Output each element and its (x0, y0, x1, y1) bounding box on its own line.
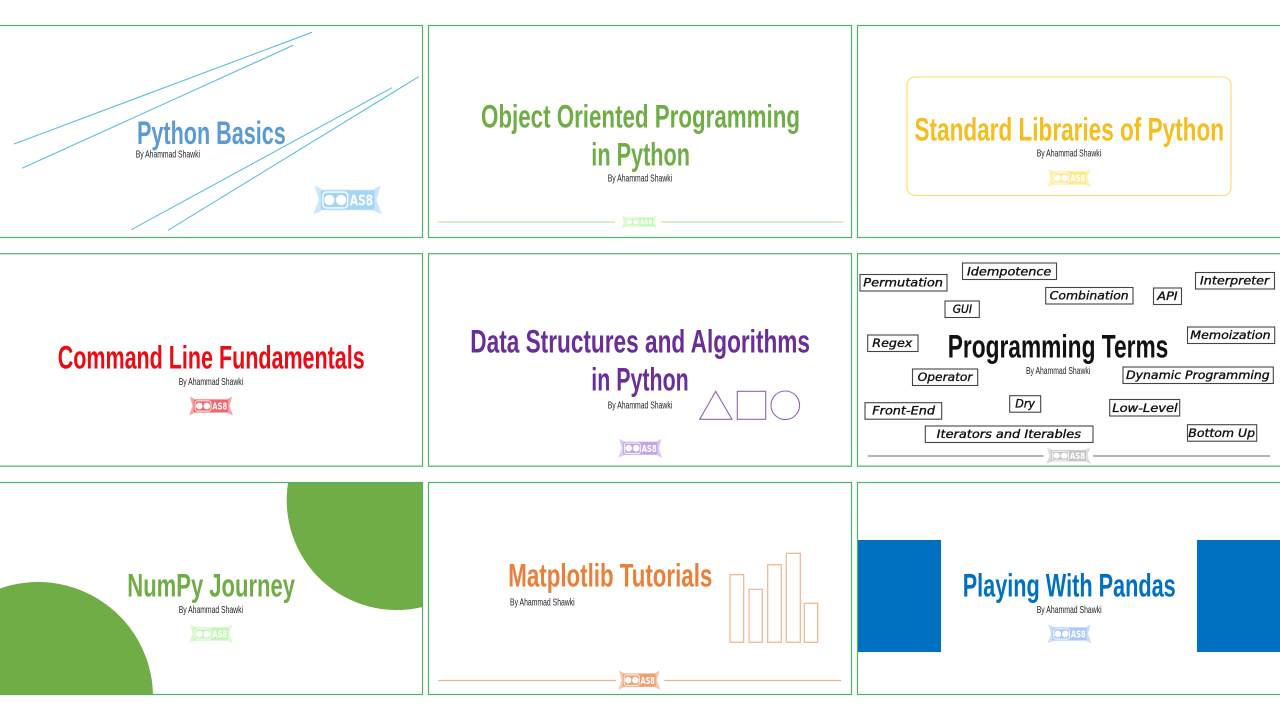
term: Dry (1010, 396, 1041, 412)
author: By Ahammad Shawki (179, 376, 243, 388)
title: Command Line Fundamentals (58, 340, 365, 376)
panel: Command Line Fundamentals (0, 254, 422, 466)
term: GUI: GUI (953, 302, 973, 316)
logo (1046, 448, 1091, 464)
title: Playing With Pandas (963, 568, 1176, 604)
decorative blue blocks (858, 540, 1280, 652)
term: Dry: Dry (1015, 396, 1035, 410)
term: Low-Level: Low-Level (1112, 401, 1179, 415)
icon: square (737, 391, 766, 419)
author: By Ahammad Shawki (1037, 604, 1102, 616)
term: Bottom Up: Bottom Up (1188, 426, 1255, 440)
logo (618, 439, 662, 458)
logo (618, 670, 660, 690)
logo (189, 624, 233, 643)
logo: AS8 (640, 218, 652, 226)
title: in Python (591, 137, 690, 173)
logo (1048, 624, 1092, 643)
author: By Ahammad Shawki (608, 400, 672, 412)
logo: AS8 (642, 444, 657, 455)
term: Regex (868, 335, 918, 352)
panel: Playing With Pandas (858, 482, 1280, 694)
term: Interpreter: Interpreter (1200, 273, 1271, 287)
term: Operator: Operator (918, 370, 974, 384)
term: Front-End: Front-End (872, 404, 936, 418)
term: Permutation: Permutation (863, 276, 943, 290)
term: API: API (1156, 289, 1178, 303)
term: GUI (945, 301, 979, 318)
logo (621, 216, 657, 229)
title: Data Structures and Algorithms (470, 324, 810, 360)
panel: Standard Libraries of Python (858, 26, 1280, 238)
term: Low-Level (1110, 400, 1180, 416)
panel: Data Structures and Algorithms (428, 254, 852, 466)
term: Iterators and Iterables (925, 426, 1093, 442)
logo (189, 396, 233, 415)
author: By Ahammad Shawki (510, 597, 575, 609)
logo: AS8 (1070, 173, 1085, 185)
footer rule (868, 455, 1270, 457)
author: By Ahammad Shawki (1037, 148, 1101, 160)
author: By Ahammad Shawki (179, 604, 243, 616)
icon: triangle (700, 391, 732, 419)
term: Idempotence: Idempotence (967, 264, 1051, 278)
panel: Programming Terms (858, 254, 1280, 466)
term: Memoization: Memoization (1190, 328, 1271, 342)
title: Object Oriented Programming (481, 98, 800, 134)
title: in Python (591, 362, 689, 398)
author: By Ahammad Shawki (1026, 365, 1090, 377)
panel: Matplotlib Tutorials (428, 482, 852, 694)
logo: AS8 (350, 192, 373, 209)
term: Dynamic Programming: Dynamic Programming (1126, 368, 1270, 382)
panel: Object Oriented Programming (428, 26, 852, 238)
panel: Python Basics (0, 26, 422, 238)
panel: NumPy Journey (0, 482, 422, 694)
logo: AS8 (212, 629, 227, 641)
title: Python Basics (137, 115, 286, 151)
logo (313, 186, 382, 214)
term: Permutation (860, 274, 947, 291)
logo (1047, 168, 1091, 187)
title: Programming Terms (948, 328, 1168, 364)
term: Idempotence (962, 263, 1056, 280)
term: Combination: Combination (1050, 289, 1129, 303)
term: API (1154, 288, 1182, 304)
title: Matplotlib Tutorials (508, 558, 712, 594)
term: Interpreter (1196, 272, 1274, 289)
author: By Ahammad Shawki (608, 173, 672, 185)
decorative diagonal lines (14, 32, 419, 230)
term: Iterators and Iterables: Iterators and Iterables (937, 427, 1081, 441)
logo: AS8 (641, 675, 655, 687)
term: Operator (912, 369, 978, 386)
logo: AS8 (1070, 451, 1085, 462)
footer rule (438, 680, 841, 682)
term: Front-End (865, 403, 942, 419)
footer rule (438, 221, 843, 223)
term: Regex: Regex (872, 336, 913, 350)
author: By Ahammad Shawki (136, 149, 200, 161)
title: NumPy Journey (127, 568, 295, 604)
decorative green circles (0, 482, 422, 694)
rounded frame (907, 77, 1231, 196)
logo: AS8 (212, 401, 227, 413)
icon: circle (771, 391, 800, 420)
bar chart (730, 553, 818, 642)
logo: AS8 (1071, 629, 1086, 641)
